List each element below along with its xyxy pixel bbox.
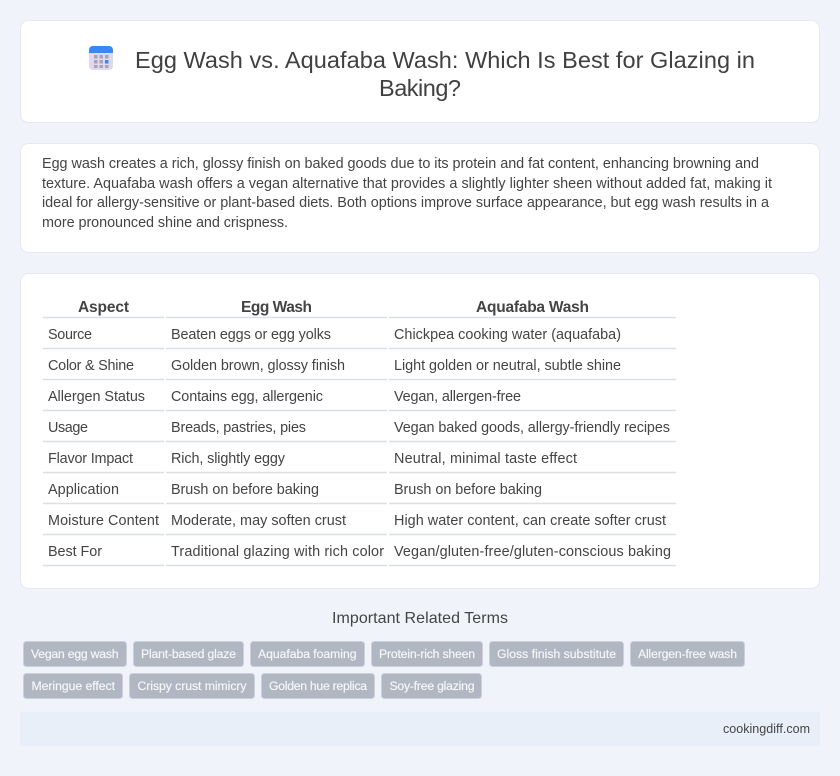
description text: texture. Aquafaba wash offers a vegan alternative that provides a slightly lighter sheen without added fat, making it (42, 176, 772, 192)
tag: Crispy crust mimicry (130, 674, 254, 698)
row: Application (48, 482, 542, 498)
table header row (78, 299, 589, 316)
tag: Crispy crust mimicry: Crispy crust mimicry (138, 679, 247, 693)
row: Usage: Breads, pastries, pies (171, 420, 306, 436)
panel: description (20, 144, 820, 252)
tag: Soy-free glazing: Soy-free glazing (390, 679, 474, 693)
tag: Vegan egg wash: Vegan egg wash (31, 647, 118, 661)
title (135, 47, 755, 101)
tag: Soy-free glazing (382, 674, 482, 698)
row: Moisture Content: High water content, can create softer crust (394, 513, 666, 529)
tag: Plant-based glaze: Plant-based glaze (141, 647, 236, 661)
icon: calendar grid (89, 46, 113, 70)
row: Flavor Impact: Neutral, minimal taste effect (394, 451, 577, 467)
row: Color and Shine: Color & Shine (48, 358, 134, 374)
row: Moisture Content (48, 513, 666, 529)
tag: Meringue effect: Meringue effect (32, 679, 116, 693)
tag: Aquafaba foaming (250, 642, 364, 666)
row: Color and Shine: Light golden or neutral, subtle shine (394, 358, 621, 374)
row: Best For (48, 544, 671, 560)
tag list (24, 642, 744, 698)
title: Baking? (379, 75, 461, 101)
tag: Protein-rich sheen (372, 642, 482, 666)
heading: Important Related Terms: Important Related Terms (332, 610, 508, 627)
tag: Allergen-free wash (630, 642, 744, 666)
panel: comparison table (20, 274, 820, 588)
footer source text: cookingdiff.com (723, 722, 810, 736)
row: Flavor Impact: Rich, slightly eggy (171, 451, 286, 467)
row: Source: Chickpea cooking water (aquafaba) (394, 327, 621, 343)
row: Usage: Vegan baked goods, allergy-friendly recipes (394, 420, 670, 436)
tag: Plant-based glaze (134, 642, 244, 666)
footer (20, 712, 820, 746)
row: Usage: Usage (48, 420, 88, 436)
tag: Vegan egg wash (24, 642, 126, 666)
row: Allergen Status: Allergen Status (48, 389, 145, 405)
row: Application: Brush on before baking (394, 482, 542, 498)
table header row: Egg Wash (241, 299, 312, 316)
row: Allergen Status (48, 389, 521, 405)
tag: Golden hue replica (262, 674, 374, 698)
row: Source: Source (48, 327, 92, 343)
row: Usage (48, 420, 670, 436)
table header row: Aspect (78, 299, 129, 316)
description text: Egg wash creates a rich, glossy finish on baked goods due to its protein and fat content, enhancing browning and (42, 156, 759, 172)
row: Application: Application (48, 482, 119, 498)
row: Color and Shine (48, 358, 621, 374)
tag: Meringue effect (24, 674, 122, 698)
tag: Allergen-free wash: Allergen-free wash (638, 647, 737, 661)
tag: Golden hue replica: Golden hue replica (269, 679, 367, 693)
row: Moisture Content: Moderate, may soften crust (171, 513, 346, 529)
row: Moisture Content: Moisture Content (48, 513, 159, 529)
row: Source (48, 327, 621, 343)
row: Allergen Status: Contains egg, allergenic (171, 389, 323, 405)
description text: ideal for allergy-sensitive or plant-based diets. Both options improve surface appearance, but egg wash results in a (42, 195, 769, 211)
tag: Gloss finish substitute: Gloss finish substitute (497, 647, 616, 661)
tag: Gloss finish substitute (490, 642, 624, 666)
table grid lines (43, 318, 676, 566)
row: Flavor Impact (48, 451, 577, 467)
row: Application: Brush on before baking (171, 482, 319, 498)
row: Best For: Best For (48, 544, 102, 560)
title: Egg Wash vs. Aquafaba Wash: Which Is Best for Glazing in (135, 47, 755, 73)
tag: Aquafaba foaming: Aquafaba foaming (258, 647, 356, 661)
description text: more pronounced shine and crispness. (42, 215, 288, 231)
row: Best For: Vegan/gluten-free/gluten-conscious baking (394, 544, 671, 560)
description text (42, 156, 772, 231)
table header row: Aquafaba Wash (476, 299, 589, 316)
row: Color and Shine: Golden brown, glossy finish (171, 358, 345, 374)
panel: header (20, 20, 820, 122)
row: Flavor Impact: Flavor Impact (48, 451, 133, 467)
row: Best For: Traditional glazing with rich color (171, 544, 384, 560)
row: Allergen Status: Vegan, allergen-free (394, 389, 521, 405)
tag: Protein-rich sheen: Protein-rich sheen (379, 647, 475, 661)
row: Source: Beaten eggs or egg yolks (171, 327, 331, 343)
